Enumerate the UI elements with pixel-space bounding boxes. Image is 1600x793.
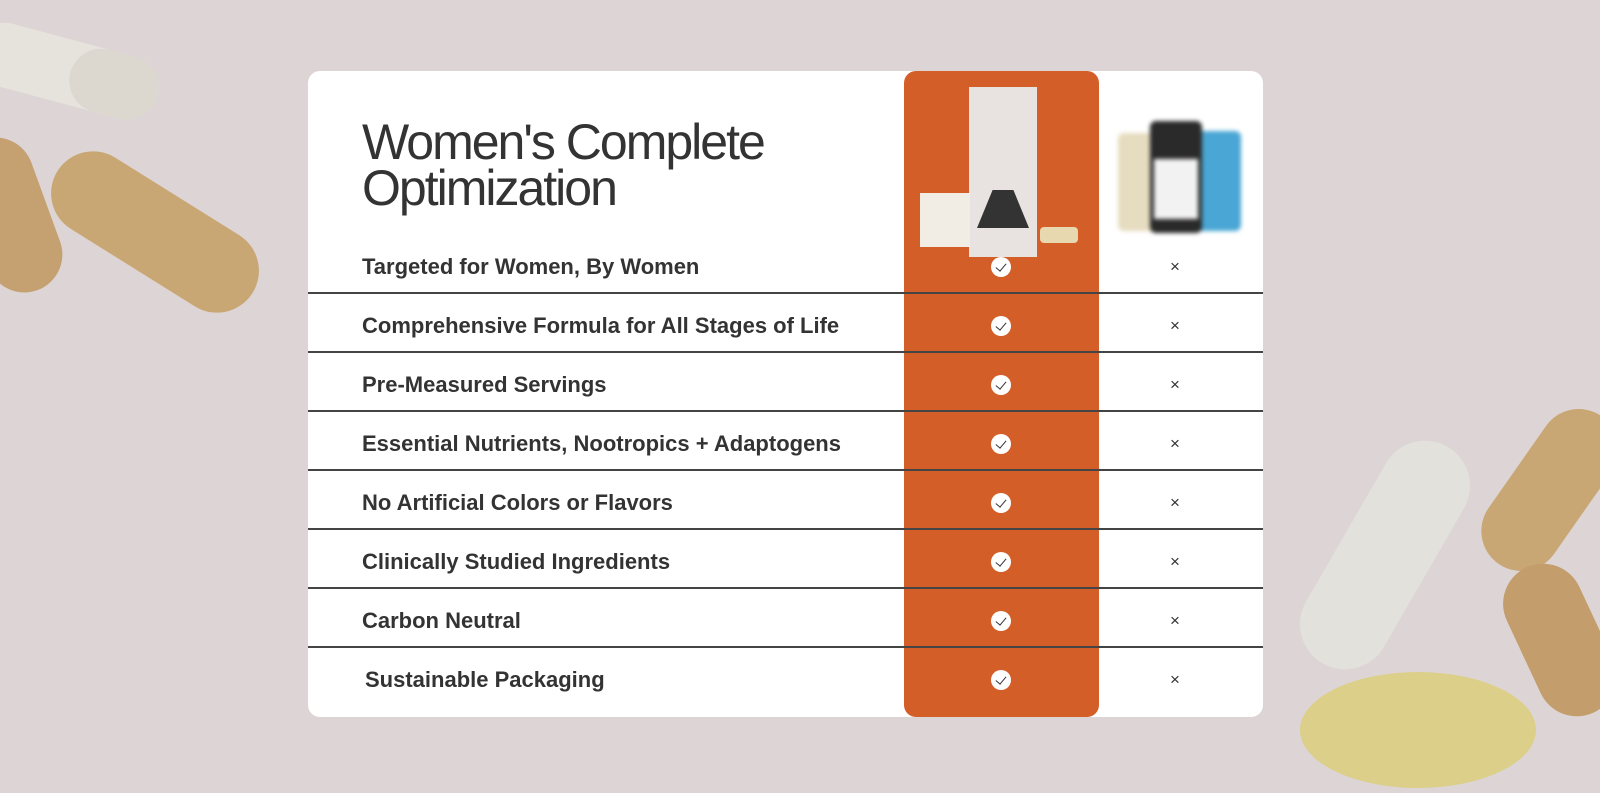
row: Clinically Studied: Clinically Studied Ingredients — [362, 549, 670, 574]
row: Targeted for Women — [362, 254, 1180, 279]
row: Comprehensive Formula: × — [1170, 316, 1180, 335]
row: Essential Nutrients: Essential Nutrients, Nootropics + Adaptogens — [362, 431, 841, 456]
row: Carbon Neutral: × — [1170, 611, 1180, 630]
row: Pre-Measured Servings — [362, 372, 1180, 397]
row: Clinically Studied — [362, 549, 1180, 574]
row: Clinically Studied: × — [1170, 552, 1180, 571]
row: Pre-Measured Servings: Pre-Measured Servings — [362, 372, 607, 397]
product image: Women's Complete Optimization — [920, 87, 1078, 257]
row: Targeted for Women: Targeted for Women, By Women — [362, 254, 699, 279]
title: Optimization — [362, 160, 616, 216]
title — [362, 114, 764, 216]
row: No Artificial Colors — [362, 490, 1180, 515]
row: Essential Nutrients — [362, 431, 1180, 456]
capsules decoration top-left — [0, 23, 259, 313]
row: No Artificial Colors: × — [1170, 493, 1180, 512]
row: Carbon Neutral: Carbon Neutral — [362, 608, 521, 633]
row: Comprehensive Formula: Comprehensive Formula for All Stages of Life — [362, 313, 839, 338]
row: Essential Nutrients: × — [1170, 434, 1180, 453]
row: Targeted for Women: × — [1170, 257, 1180, 276]
row: Sustainable Packaging: × — [1170, 670, 1180, 689]
orange highlight column — [904, 71, 1099, 717]
title: Women's Complete — [362, 114, 764, 170]
row: No Artificial Colors: No Artificial Colors or Flavors — [362, 490, 673, 515]
product image: competitor bottles — [1116, 118, 1244, 236]
capsules decoration bottom-right — [1300, 409, 1600, 788]
row: Comprehensive Formula — [362, 313, 1180, 338]
row: Sustainable Packaging: Sustainable Packaging — [365, 667, 605, 692]
comparison card — [308, 71, 1263, 717]
row: Sustainable Packaging — [365, 667, 1180, 692]
row: Pre-Measured Servings: × — [1170, 375, 1180, 394]
row: Carbon Neutral — [362, 608, 1180, 633]
